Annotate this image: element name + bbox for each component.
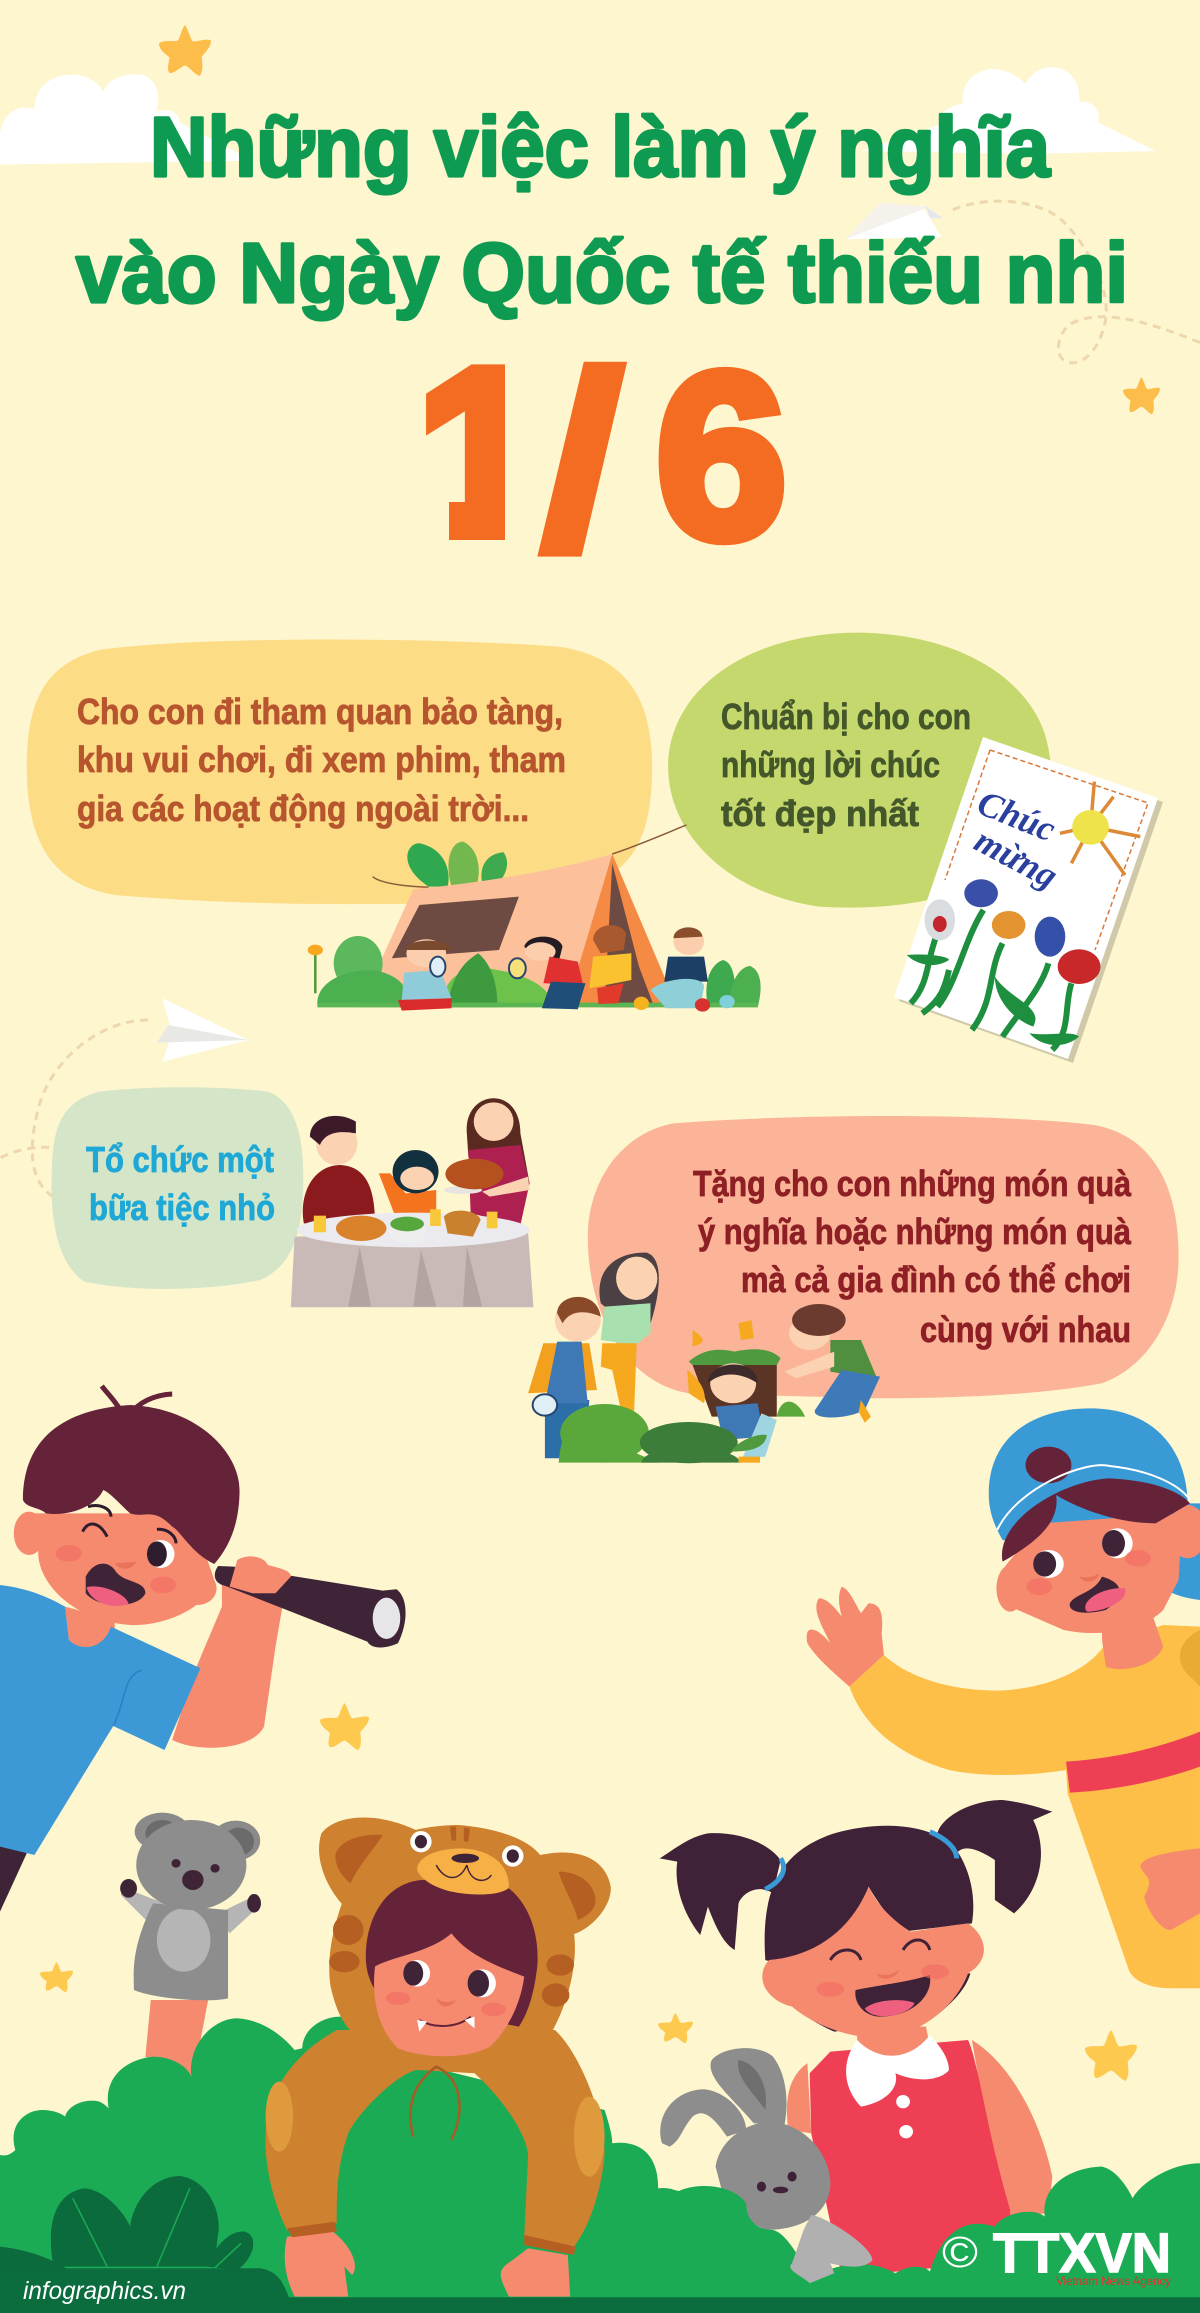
dark leaves bottom left — [0, 2176, 253, 2270]
rabbit plush toy — [660, 2048, 830, 2230]
panel: green wishes bubble — [668, 633, 1051, 908]
green bushes in foreground — [658, 2163, 1200, 2313]
panel: salmon gifts bubble: mà cả gia đình có thể chơi — [741, 1259, 1131, 1300]
illustration: hand-drawn greeting card — [894, 737, 1163, 1063]
date 1/6: 1 — [417, 320, 548, 583]
source: infographics.vn: infographics.vn — [23, 2277, 186, 2305]
panel: yellow outings bubble: Cho con đi tham quan bảo tàng, — [77, 691, 563, 732]
date 1/6: / — [538, 319, 628, 604]
panel: salmon gifts bubble: ý nghĩa hoặc những món quà — [698, 1211, 1132, 1252]
card greeting text: Chúc — [972, 782, 1061, 849]
character: boy in blue cap and yellow shirt — [807, 1408, 1200, 1988]
panel: green wishes bubble: những lời chúc — [721, 744, 940, 785]
character: boy with telescope — [0, 1386, 406, 1912]
panel: yellow outings bubble: khu vui chơi, đi xem phim, tham — [77, 739, 566, 780]
title: Những việc làm ý nghĩa — [150, 100, 1051, 194]
card greeting text: mừng — [968, 820, 1064, 896]
character: child in tiger costume — [265, 1817, 611, 2297]
title — [76, 100, 1128, 320]
panel: green wishes bubble: tốt đẹp nhất — [721, 793, 919, 834]
koala hand puppet — [120, 1813, 261, 2077]
card greeting text — [968, 782, 1064, 896]
cap — [989, 1408, 1200, 1600]
illustration: family party table — [291, 1098, 533, 1307]
panel: mint party bubble: Tổ chức một — [86, 1139, 274, 1180]
bottom footer band — [0, 2268, 1200, 2313]
star: right of 1/6 — [1123, 377, 1160, 414]
panel: green wishes bubble: Chuẩn bị cho con — [721, 696, 971, 737]
header decorations: clouds, plane, dashed path, stars — [0, 67, 1200, 363]
illustration: children exploring the garden — [528, 1253, 880, 1463]
character: laughing girl with pigtails — [660, 1800, 1052, 2277]
star: top left — [159, 25, 211, 76]
illustration: camping tent with children — [308, 825, 761, 1012]
green bushes behind characters — [0, 2017, 673, 2313]
panel: salmon gifts bubble: cùng với nhau — [920, 1309, 1131, 1350]
paper plane and dashed trail left — [157, 998, 249, 1062]
panel: mint party bubble — [51, 1087, 303, 1289]
panel: mint party bubble: bữa tiệc nhỏ — [89, 1187, 275, 1228]
panel: salmon gifts bubble: Tặng cho con những món quà — [693, 1163, 1132, 1204]
logo: TTXVN: © — [942, 2228, 978, 2277]
title: vào Ngày Quốc tế thiếu nhi — [76, 226, 1128, 320]
second hand — [1140, 1848, 1200, 1930]
logo: TTXVN: Vietnam News Agency — [1056, 2274, 1171, 2288]
telescope — [215, 1566, 406, 1648]
stars: lower scene — [40, 1962, 1137, 2081]
star: centre — [320, 1703, 369, 1750]
panel: salmon gifts bubble — [588, 1116, 1179, 1398]
raised arm — [172, 1580, 287, 1748]
logo: TTXVN: TTXVN — [993, 2221, 1171, 2284]
dashed trail — [0, 1020, 148, 1198]
rabbit arm over bush — [790, 2215, 872, 2283]
panel: yellow outings bubble: gia các hoạt động ngoài trời... — [77, 788, 529, 829]
panel: yellow outings bubble — [27, 640, 652, 904]
date 1/6: 6 — [656, 324, 787, 587]
date 1/6 — [426, 362, 784, 557]
